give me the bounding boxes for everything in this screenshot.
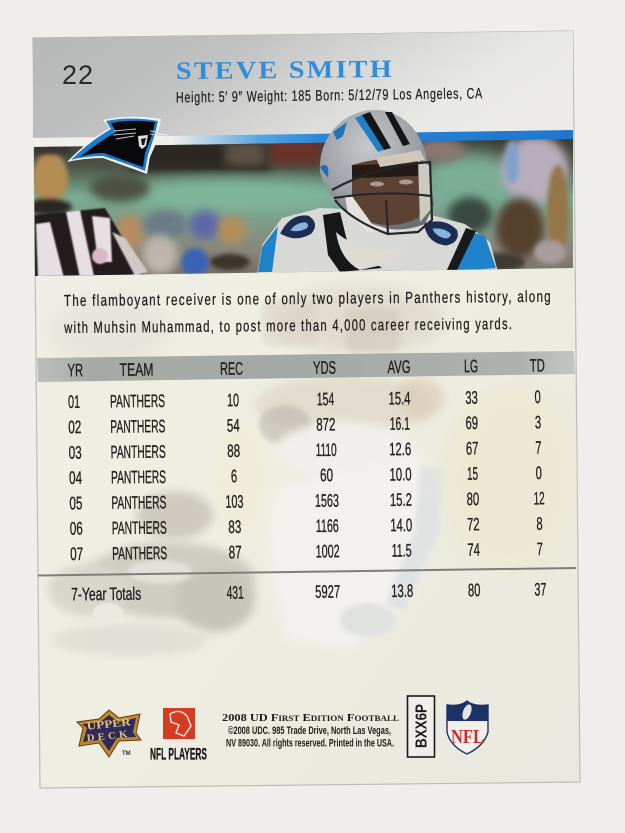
- totals row: 37: [534, 579, 547, 600]
- row 04: 10.0: [389, 464, 412, 485]
- silver header panel: [33, 31, 573, 139]
- row 01: 01: [68, 392, 80, 412]
- row 02: 69: [465, 413, 478, 433]
- row 06: [70, 514, 543, 539]
- row 01: 10: [227, 390, 239, 410]
- row 06: 83: [228, 517, 241, 537]
- row 07: PANTHERS: [112, 543, 167, 564]
- copyright text: 2008 UD First Edition Football: [222, 712, 399, 724]
- row 06: 1166: [316, 516, 339, 536]
- row 04: 15: [467, 464, 478, 484]
- row 01: [68, 387, 541, 412]
- row 01: 33: [465, 388, 478, 408]
- row 05: 80: [467, 489, 479, 509]
- photo strip: [24, 135, 580, 280]
- row 07: 7: [537, 539, 543, 559]
- row 02: [68, 412, 541, 437]
- row 06: PANTHERS: [112, 518, 167, 538]
- row 06: 72: [467, 514, 480, 534]
- row 01: 154: [317, 389, 334, 409]
- row 03: 03: [69, 443, 82, 463]
- copyright text: NV 89030. All rights reserved. Printed in the USA.: [226, 738, 394, 750]
- row 07: 87: [228, 542, 242, 562]
- row 04: PANTHERS: [111, 467, 166, 487]
- row 02: 16.1: [390, 414, 410, 434]
- row 07: 07: [70, 544, 83, 564]
- row 03: 67: [466, 438, 479, 458]
- blurb text: [63, 289, 552, 337]
- row 03: 88: [227, 441, 240, 461]
- table header: YDS: [313, 358, 336, 378]
- table header band: [37, 351, 575, 382]
- row 04: [69, 463, 542, 488]
- code box: BXX6P: BXX6P: [414, 704, 430, 748]
- totals row: 80: [468, 580, 481, 600]
- table header: AVG: [387, 357, 411, 377]
- player helmet: [320, 110, 434, 234]
- player jersey: [257, 208, 498, 275]
- card number: 22: [62, 60, 93, 90]
- row 03: 12.6: [389, 439, 411, 459]
- row 07: 11.5: [391, 540, 412, 561]
- row 02: 3: [535, 412, 541, 432]
- copyright text: ©2008 UDC. 985 Trade Drive, North Las Vegas,: [228, 725, 391, 737]
- row 03: [69, 438, 542, 463]
- row 03: 7: [535, 438, 542, 458]
- logo: Upper Deck: TM: [122, 751, 131, 757]
- facemask: [332, 162, 432, 234]
- blurred stadium background: [90, 135, 569, 276]
- row 05: 103: [225, 492, 244, 512]
- row 04: 6: [231, 466, 237, 486]
- row 05: PANTHERS: [111, 492, 167, 513]
- row 05: 15.2: [390, 490, 412, 510]
- row 06: 06: [70, 519, 83, 539]
- player bio line: Height: 5′ 9″ Weight: 185 Born: 5/12/79 Los Angeles, CA: [176, 85, 483, 106]
- totals row: 13.8: [391, 581, 413, 601]
- row 07: [70, 539, 543, 564]
- copyright text: [222, 712, 399, 750]
- row 07: 1002: [315, 541, 340, 561]
- row 01: 15.4: [388, 388, 411, 409]
- logo: Upper Deck: DECK: [86, 729, 131, 744]
- table header: TD: [530, 355, 545, 376]
- jersey numbers: [285, 219, 454, 242]
- total divider line: [38, 567, 576, 576]
- row 04: 60: [320, 465, 333, 485]
- ghosted action photo watermark: [48, 286, 580, 656]
- row 01: 0: [534, 387, 541, 407]
- table header: LG: [464, 356, 478, 376]
- row 06: 8: [536, 514, 543, 534]
- code box: BXX6P: [408, 696, 434, 757]
- player name: STEVE SMITH: [176, 56, 394, 85]
- logo: Upper Deck: UPPER: [86, 716, 132, 733]
- logo: NFL shield: NFL: [451, 726, 484, 748]
- row 02: PANTHERS: [110, 416, 165, 437]
- referee: [34, 146, 148, 276]
- row 05: 1563: [315, 491, 339, 511]
- row 07: 74: [467, 540, 480, 560]
- row 02: 54: [227, 415, 240, 436]
- table header: TEAM: [119, 360, 154, 380]
- row 01: PANTHERS: [110, 391, 165, 411]
- row 06: 14.0: [390, 515, 412, 535]
- totals row: 7-Year Totals: [71, 584, 141, 604]
- row 03: 1110: [316, 440, 337, 460]
- panel: card: NFL PLAYERS: [150, 744, 207, 764]
- row 02: 872: [316, 414, 335, 435]
- row 05: 12: [533, 488, 545, 508]
- stats table: [67, 355, 548, 604]
- table header: [67, 355, 545, 380]
- accent band: [33, 130, 573, 148]
- logo: Upper Deck: [77, 710, 141, 757]
- row 03: PANTHERS: [111, 442, 166, 462]
- row 04: 04: [69, 468, 82, 488]
- row 02: 02: [68, 417, 81, 437]
- row 05: [69, 488, 545, 513]
- totals row: 431: [227, 583, 244, 603]
- team logo: panther: [67, 117, 169, 174]
- table header: YR: [67, 360, 83, 380]
- table header: REC: [220, 359, 243, 379]
- logo: NFL shield: [447, 701, 488, 754]
- row 05: 05: [69, 493, 83, 513]
- totals row: 5927: [315, 582, 340, 602]
- logo: NFL Players: [150, 708, 207, 764]
- row 04: 0: [536, 463, 542, 483]
- totals row: [71, 579, 547, 604]
